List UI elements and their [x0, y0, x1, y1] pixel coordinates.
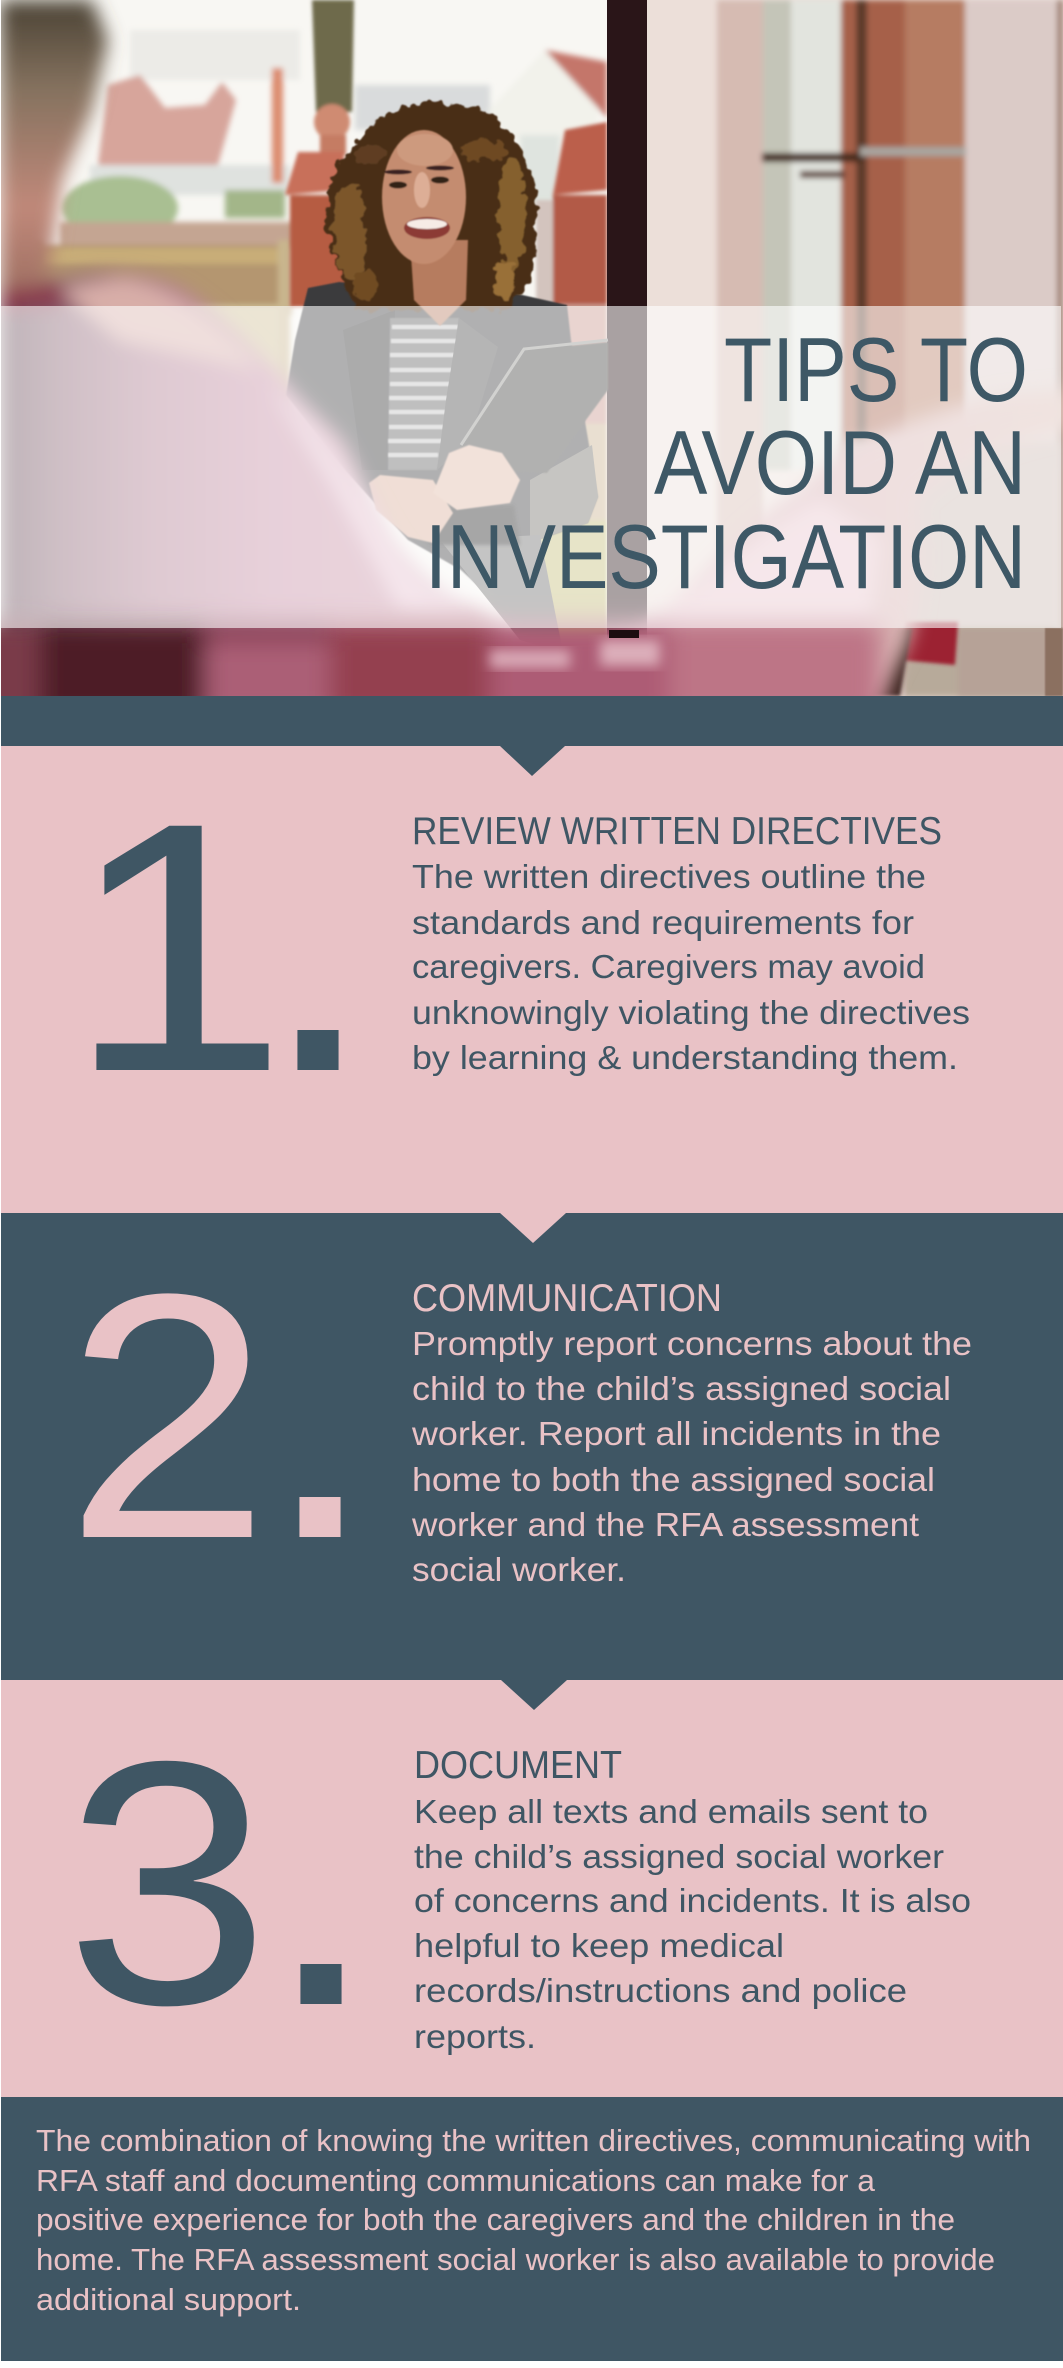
- hands: [369, 445, 520, 543]
- text block: tip 1: caregivers. Caregivers may avoid: [412, 948, 925, 985]
- text block: tip 2: worker and the RFA assessment: [411, 1506, 919, 1543]
- number 1: [66, 732, 378, 1150]
- panel: tip 2 communication: [1, 1199, 1063, 1680]
- number 1: 1: [66, 750, 288, 1146]
- title: [425, 320, 1028, 608]
- text block: tip 1: by learning & understanding them.: [412, 1039, 958, 1076]
- panel: closing note: [1, 2097, 1063, 2361]
- text block: closing note: positive experience for both the caregivers and the children in the: [36, 2202, 955, 2237]
- text block: tip 1: [412, 858, 970, 1076]
- text block: tip 1: standards and requirements for: [412, 904, 914, 941]
- text block: tip 2: [411, 1325, 972, 1588]
- striped top: [388, 318, 459, 470]
- text block: tip 3: of concerns and incidents. It is also: [414, 1882, 971, 1919]
- text block: tip 3: Keep all texts and emails sent to: [414, 1793, 928, 1830]
- text block: closing note: The combination of knowing the written directives, communicating with: [36, 2123, 1031, 2158]
- arrow: pointer into tip 1: [500, 746, 565, 776]
- panel: tip 3 document: [1, 1666, 1063, 2097]
- foreground figure: [0, 0, 1063, 720]
- text block: tip 3: [414, 1793, 971, 2055]
- translucent title band: [1, 306, 1061, 628]
- text block: closing note: home. The RFA assessment social worker is also available to provide: [36, 2242, 995, 2277]
- woman: [286, 103, 608, 653]
- neck: [410, 240, 468, 326]
- text block: tip 3: the child’s assigned social worker: [414, 1838, 944, 1875]
- header band: [1, 696, 1063, 746]
- text block: tip 2: home to both the assigned social: [412, 1461, 935, 1498]
- text block: tip 3: reports.: [414, 2018, 536, 2055]
- text block: tip 1: The written directives outline the: [412, 858, 926, 895]
- heading: tip 3: DOCUMENT: [414, 1744, 622, 1787]
- arrow: pointer into tip 3: [501, 1680, 567, 1710]
- curly hair: [326, 103, 538, 310]
- arrow: pointer into tip 2: [500, 1213, 566, 1243]
- door frame: [607, 0, 647, 638]
- text block: closing note: RFA staff and documenting communications can make for a: [36, 2163, 876, 2198]
- text block: tip 2: child to the child’s assigned social: [412, 1370, 951, 1407]
- heading: tip 1: REVIEW WRITTEN DIRECTIVES: [412, 810, 942, 853]
- number 2: .: [260, 1199, 380, 1617]
- text block: closing note: additional support.: [36, 2282, 301, 2317]
- photo: caregiver greeting a smiling social worker at the door: [0, 0, 1063, 722]
- number 1: .: [258, 732, 378, 1150]
- tree trunk: [312, 0, 354, 112]
- text block: tip 1: unknowingly violating the directives: [412, 994, 970, 1031]
- text block: tip 3: records/instructions and police: [414, 1972, 907, 2009]
- text block: tip 2: social worker.: [412, 1551, 626, 1588]
- number 3: [65, 1666, 381, 2084]
- text block: tip 2: Promptly report concerns about the: [412, 1325, 972, 1362]
- text block: closing note: [36, 2123, 1031, 2317]
- number 2: [65, 1199, 380, 1617]
- number 3: 3: [65, 1689, 270, 2077]
- text block: tip 3: helpful to keep medical: [414, 1927, 784, 1964]
- number 3: .: [261, 1666, 381, 2084]
- sleeve band below the title strip: [1, 609, 896, 696]
- face: [382, 130, 466, 264]
- heading: tip 2: COMMUNICATION: [412, 1277, 722, 1320]
- text block: tip 2: worker. Report all incidents in the: [411, 1415, 941, 1452]
- number 2: 2: [65, 1221, 270, 1611]
- panel: tip 1 review written directives: [1, 732, 1063, 1213]
